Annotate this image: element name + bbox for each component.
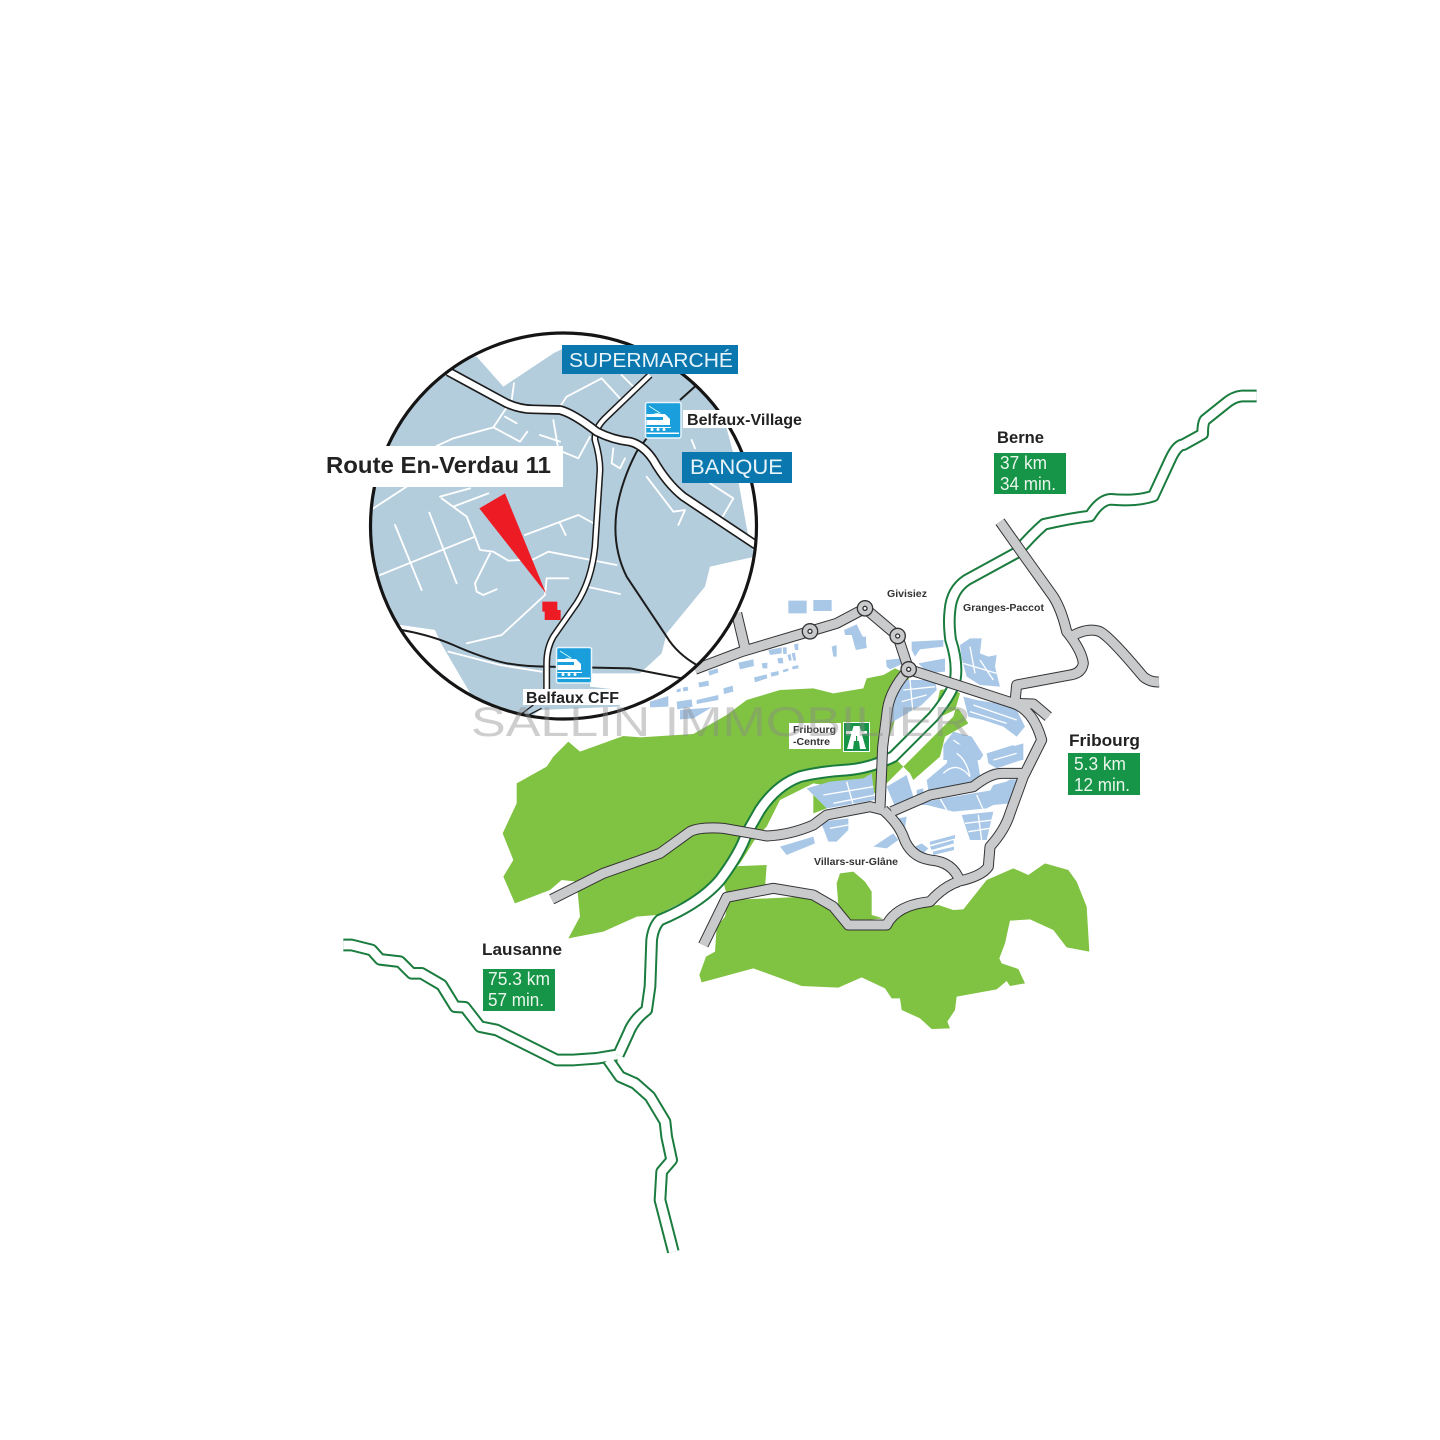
icon: train station Belfaux CFF (556, 648, 592, 683)
destination: Lausanne: Lausanne (482, 940, 562, 959)
destination: Lausanne (482, 940, 562, 1011)
label: bank: BANQUE (690, 456, 783, 479)
building marker (542, 602, 561, 620)
pointer to the address (479, 493, 546, 593)
local streets (373, 375, 733, 672)
railway lines (402, 385, 697, 716)
destination: Lausanne: 75.3 km (488, 969, 550, 989)
motorway A12 (343, 396, 1257, 1252)
motorway exit label: -Centre (793, 736, 830, 748)
destination: Fribourg: Fribourg (1069, 731, 1140, 750)
icon: motorway sign (844, 722, 870, 752)
label: Belfaux CFF: Belfaux CFF (526, 690, 619, 707)
destination: Fribourg: 5.3 km (1074, 754, 1126, 774)
destination: Berne: Berne (997, 429, 1044, 447)
forests (503, 668, 1089, 1029)
destination: Lausanne: 57 min. (488, 990, 544, 1010)
address label (320, 446, 563, 487)
buildings: Fribourg and Villars (780, 743, 1022, 855)
forest: south (699, 863, 1089, 1029)
grey road network (552, 522, 1159, 945)
urban buildings (650, 600, 1025, 855)
destination: Berne: 37 km (1000, 453, 1047, 473)
destination: Berne: 34 min. (1000, 474, 1056, 494)
forest: north-west (503, 668, 910, 938)
forest: east of the junction (813, 688, 968, 813)
motorway exit label (789, 723, 841, 749)
label: supermarket: SUPERMARCHÉ (569, 349, 733, 372)
buildings: Givisiez strip (650, 600, 867, 719)
label: Belfaux-Village: Belfaux-Village (687, 412, 802, 429)
label: bank (682, 452, 792, 483)
main road (448, 372, 758, 547)
destination: Fribourg: 12 min. (1074, 775, 1130, 795)
watermark: SALLIN IMMOBILIER (471, 698, 971, 745)
address label: Route En-Verdau 11 (326, 452, 551, 478)
secondary road (547, 375, 650, 690)
inset circle map (363, 333, 758, 725)
label: Granges-Paccot: Granges-Paccot (963, 602, 1045, 614)
icon: train station Belfaux-Village (646, 402, 681, 438)
label: Givisiez: Givisiez (887, 588, 927, 600)
residential area (363, 348, 755, 725)
buildings: Granges-Paccot (860, 637, 1025, 760)
label: supermarket (562, 345, 738, 374)
label: Villars-sur-Glâne: Villars-sur-Glâne (814, 856, 898, 868)
destination: Berne (994, 429, 1066, 494)
destination: Fribourg (1068, 731, 1140, 795)
white patch bottom left (400, 625, 440, 642)
motorway exit label: Fribourg (793, 724, 836, 736)
roundabouts (802, 600, 917, 678)
